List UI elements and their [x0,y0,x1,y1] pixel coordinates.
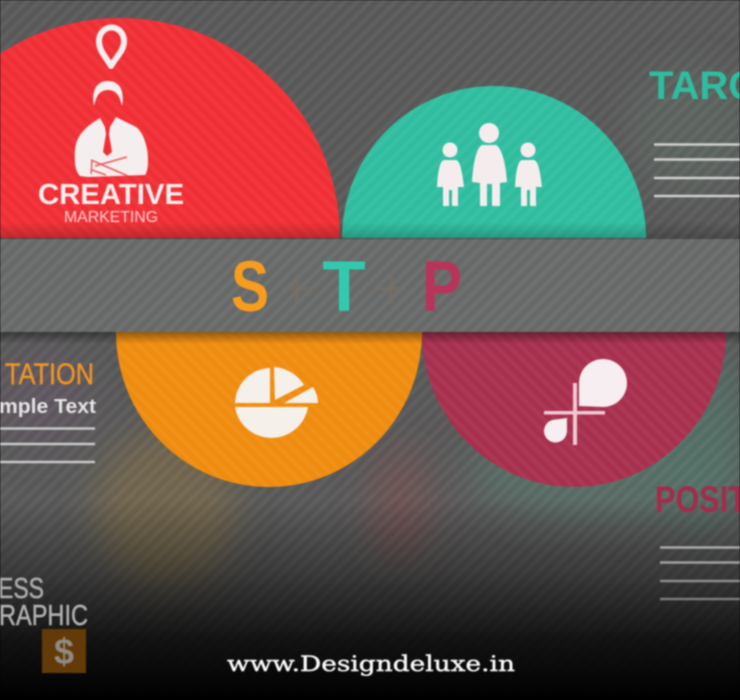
icon: three people [437,123,542,206]
plus sign: + [279,255,315,322]
letter T: T [322,248,366,327]
letter P: P [422,248,462,327]
panel: red semicircle creative marketing [0,18,340,238]
text lines: positioning [660,548,740,599]
icon: dollar badge: $ [54,631,74,672]
text lines: segmentation [0,428,95,462]
icon: businessman [75,81,148,177]
business infographic label [0,573,88,632]
panel: teal semicircle targeting [342,86,646,238]
creative label: CREATIVE [38,179,184,211]
icon: pie chart [235,367,318,438]
panel: orange semicircle segmentation [116,332,422,487]
world map tint [0,70,740,590]
icon: light bulb [99,28,124,66]
icon: positioning cross and drops [544,359,627,445]
icon: dollar badge [42,629,86,673]
marketing label: MARKETING [64,209,158,226]
center band [0,222,740,344]
word: infographic: RAPHIC [0,600,88,632]
sample text: mple Text [0,396,96,418]
letter S: S [231,248,269,327]
watermark: website url: www.Designdeluxe.in [227,652,515,676]
stp letters [231,248,462,327]
text lines: targeting [654,144,740,196]
heading: segmentation: TATION [5,358,94,391]
plus sign second: + [373,255,409,322]
panel: maroon semicircle positioning [422,332,726,487]
